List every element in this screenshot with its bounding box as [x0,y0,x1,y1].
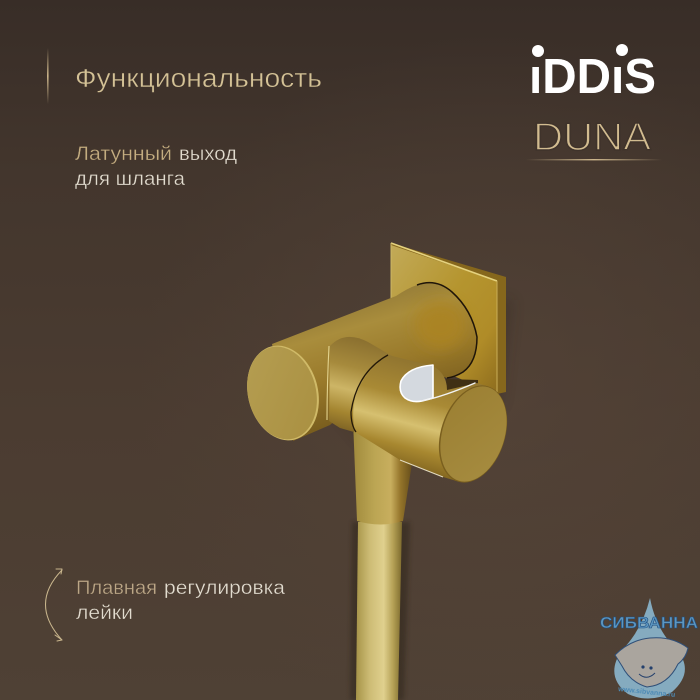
brand logo: IDDIS: ıDDıS [529,50,656,104]
white clip [400,365,475,402]
text block: brass hose outlet [75,144,237,190]
wall shadow [300,300,512,455]
collar edge highlight [327,346,329,420]
text block: smooth adjustment: регулировка [164,578,285,599]
watermark: Sibvanna logo [600,598,698,699]
heading divider line [47,48,49,104]
product: brass wall outlet with holder and hose [237,243,519,700]
dark gap behind the clip [446,379,478,392]
heading: Функциональность [75,65,322,93]
body highlight patch [414,301,466,349]
text block: smooth adjustment: лейки [76,603,133,624]
mounting plate [391,243,506,394]
text block: brass hose outlet: выход [179,144,237,165]
text block: smooth adjustment [76,578,285,624]
series name: DUNA: DUNA [533,116,651,159]
text block: brass hose outlet: Латунный [75,144,172,165]
watermark: Sibvanna logo: www.sibvanna.ru [617,686,676,699]
right end cap [427,377,519,491]
hose elbow [353,420,414,524]
pivot collar [329,337,392,432]
holder seam [351,355,388,432]
holder lower edge highlight [400,460,443,477]
holder cylinder [353,355,490,482]
main cylinder body [272,283,477,441]
left end cap [237,338,329,448]
series underline [526,159,662,160]
body wall seam [417,283,477,378]
icon: curved double arrow [46,569,62,641]
watermark: Sibvanna logo: СИБВАННА [600,615,698,632]
text block: brass hose outlet: для шланга [75,169,185,190]
text block: smooth adjustment: Плавная [76,578,157,599]
hose [350,522,410,700]
